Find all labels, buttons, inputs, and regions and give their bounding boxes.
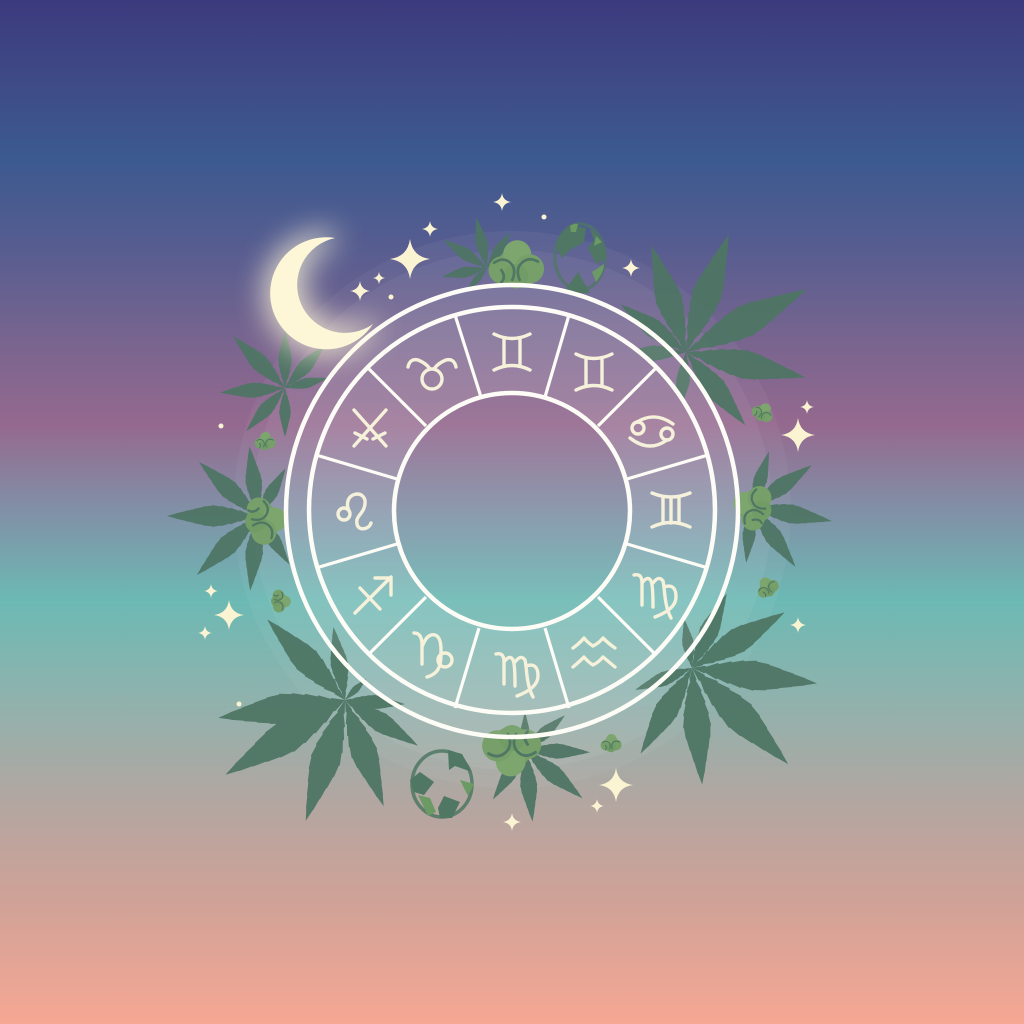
sparkles and dots (198, 193, 815, 831)
moon glow (270, 237, 373, 349)
glyph: sagittarius (355, 577, 391, 613)
leaf: top right (620, 234, 806, 425)
glyph: aquarius (573, 638, 615, 667)
leaf ring: top (555, 224, 606, 293)
glyph: crossed lines (354, 410, 386, 446)
leaf: middle left (167, 445, 295, 592)
leaf: bottom small (493, 714, 590, 822)
wheel rings (286, 285, 738, 737)
zodiac wheel (286, 285, 738, 737)
glyph: capricorn (414, 633, 452, 677)
cannabis buds (241, 240, 782, 776)
halo behind wheel (233, 231, 791, 789)
glyph: virgo bottom (496, 654, 538, 697)
glyph: virgo right (634, 575, 676, 618)
leaf: top small (442, 218, 510, 287)
leaf: bottom left (216, 610, 423, 825)
leaf ring: bottom (410, 750, 474, 818)
glyph: taurus (408, 360, 456, 389)
glyph: gemini right (576, 354, 612, 390)
cannabis leaves around wheel (167, 216, 833, 825)
zodiac infographic (168, 193, 832, 830)
moon body (270, 237, 373, 349)
wheel translucent bands (309, 308, 715, 714)
crescent moon (270, 237, 373, 349)
glyph: cancer (630, 417, 673, 446)
leaf: upper left (220, 330, 330, 437)
glyph: gemini three bars (652, 493, 690, 527)
wheel dividers (316, 315, 708, 708)
leaf: bottom right (630, 590, 819, 786)
glyph: leo (338, 494, 371, 529)
glyph: gemini top (494, 334, 530, 370)
leaf: middle right (742, 452, 832, 567)
